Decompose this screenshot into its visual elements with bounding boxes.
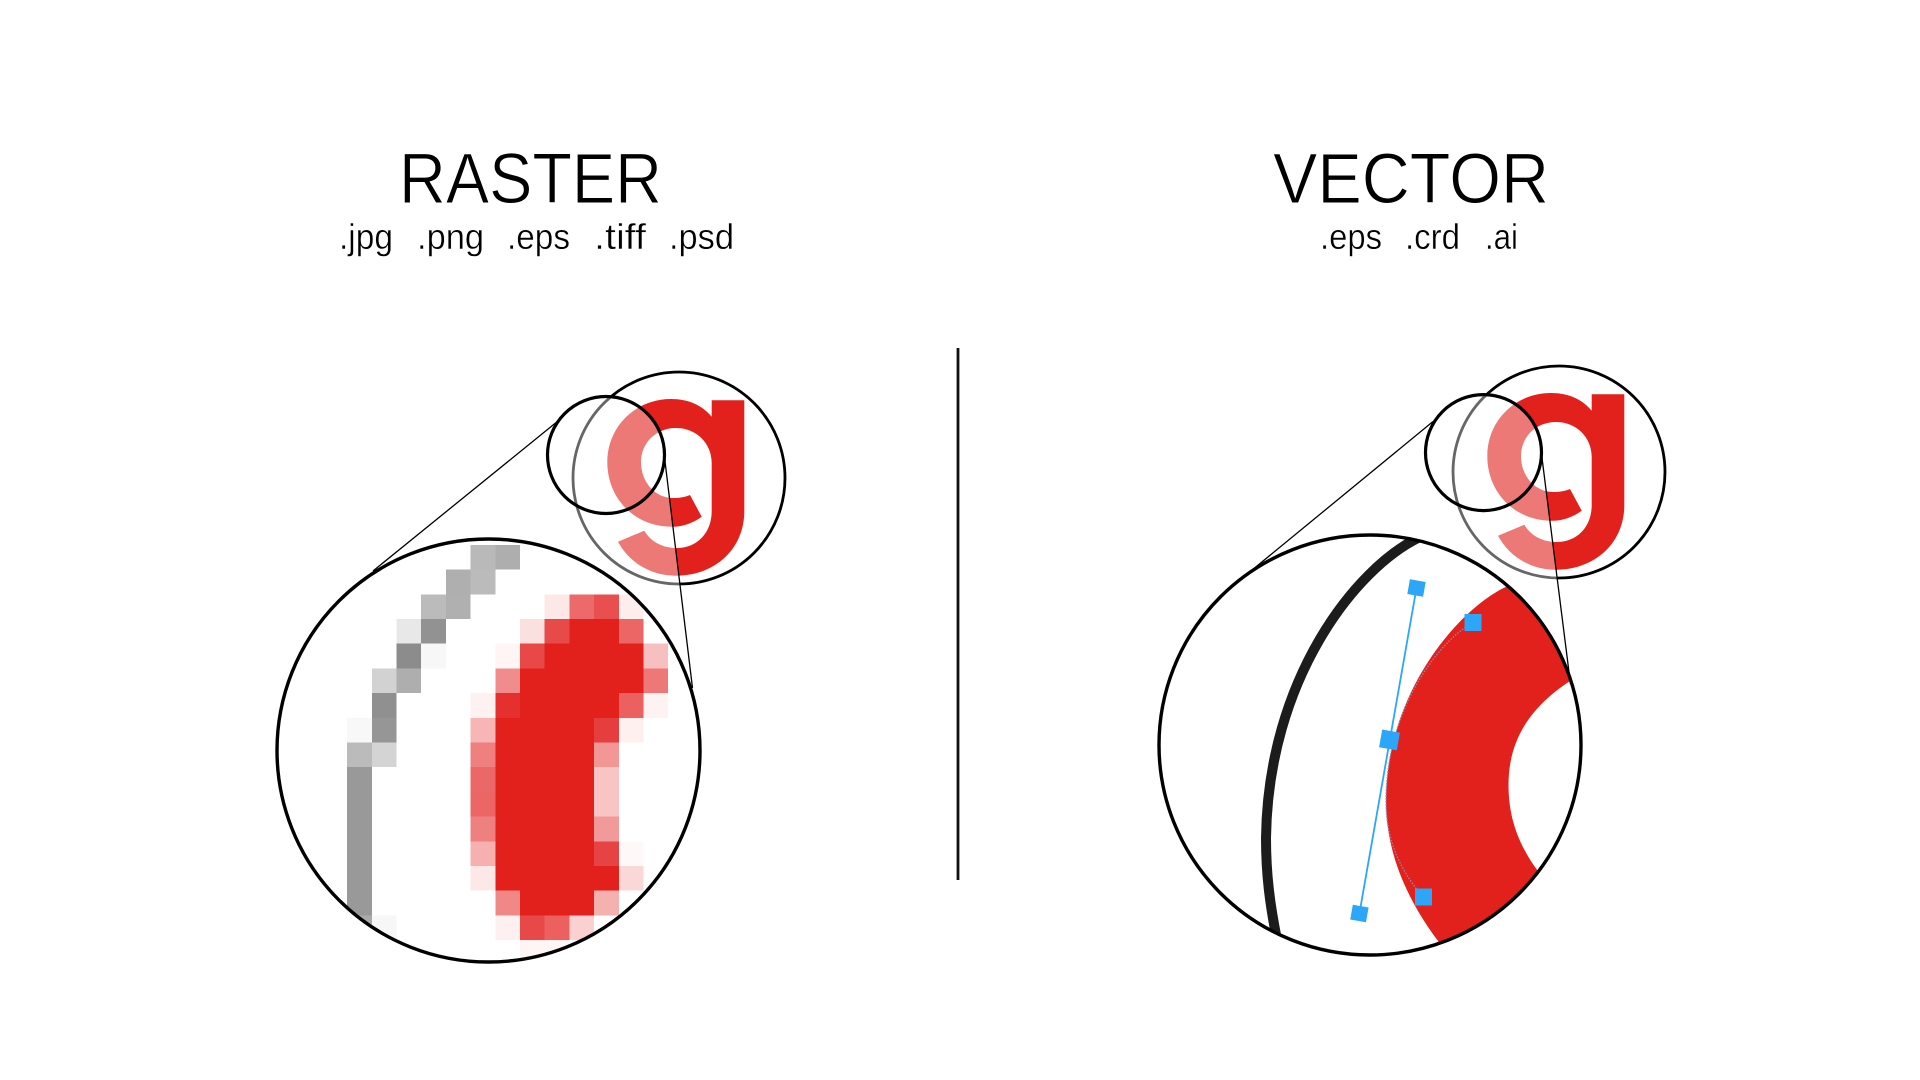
- curves: black outline and red band: [1266, 537, 1585, 950]
- zoomed circle: smooth vector edge: [1159, 535, 1585, 955]
- text block: vector file formats: .ai: [1485, 216, 1518, 257]
- magnifier cone overlay: [1240, 394, 1572, 690]
- zoom lines: vector: [1229, 422, 1570, 684]
- text block: raster file formats: .tiff: [594, 216, 647, 257]
- bezier handles: [1350, 579, 1482, 922]
- text block: raster file formats: .png: [417, 216, 484, 257]
- panel: vector: [1159, 140, 1665, 955]
- text block: vector file formats: .eps: [1320, 216, 1382, 257]
- zoomed circle: pixelated edge: [277, 539, 700, 965]
- icon: raster logo in circle: [573, 372, 785, 584]
- text block: raster file formats: [339, 216, 734, 257]
- text block: raster file formats: .eps: [507, 216, 570, 257]
- text block: raster file formats: .psd: [669, 216, 734, 257]
- text block: vector file formats: [1320, 216, 1518, 257]
- heading: raster: RASTER: [399, 140, 662, 219]
- magnifier cone overlay: [373, 396, 693, 691]
- magnifier: small circle: [1426, 395, 1542, 511]
- panel: raster: [277, 140, 785, 965]
- zoom lines: raster: [373, 421, 692, 688]
- heading: vector: VECTOR: [1273, 140, 1549, 219]
- text block: raster file formats: .jpg: [339, 216, 393, 257]
- divider: [957, 348, 959, 880]
- magnifier: small circle: [548, 396, 664, 514]
- pixels: gray and red grid: [347, 545, 668, 965]
- icon: vector logo in circle: [1453, 366, 1665, 578]
- text block: vector file formats: .crd: [1405, 216, 1460, 257]
